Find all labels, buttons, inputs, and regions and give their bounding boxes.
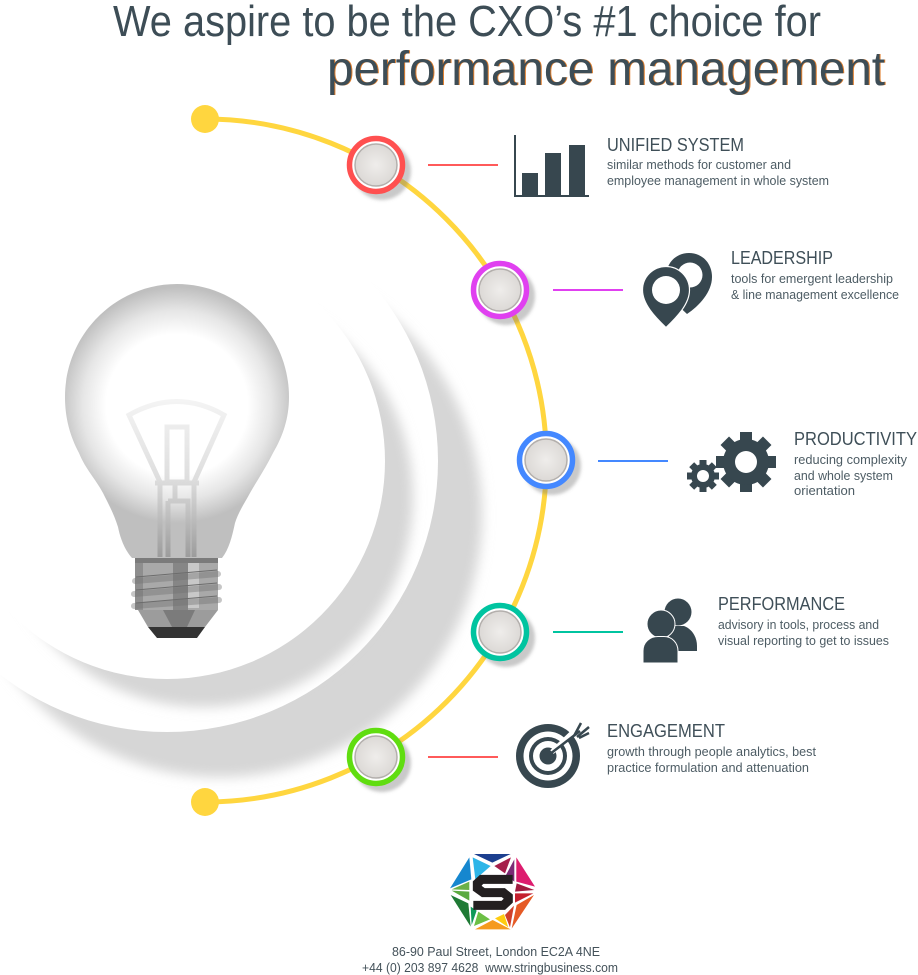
footer address: 86-90 Paul Street, London EC2A 4NE	[392, 945, 600, 959]
bottom end dot	[191, 788, 219, 816]
text: engagement: practice formulation and attenuation	[607, 761, 809, 775]
text: productivity: reducing complexity	[794, 453, 908, 467]
connector: engagement	[428, 756, 498, 758]
text: engagement	[607, 720, 817, 775]
bulb glass	[65, 284, 289, 558]
node: productivity	[520, 434, 581, 495]
text: leadership: LEADERSHIP	[731, 247, 833, 268]
text: leadership: tools for emergent leadership	[731, 272, 893, 286]
icon: bar chart	[514, 135, 589, 197]
logo	[450, 854, 535, 929]
light bulb	[65, 284, 289, 638]
icon: target	[516, 723, 589, 788]
footer address	[362, 945, 618, 975]
text: engagement: growth through people analytics, best	[607, 745, 817, 759]
text: engagement: ENGAGEMENT	[607, 720, 725, 741]
text: unified system	[607, 134, 829, 188]
text: unified system: similar methods for customer and	[607, 158, 791, 172]
footer address: +44 (0) 203 897 4628 www.stringbusiness.com	[362, 961, 618, 975]
title: performance management	[327, 43, 885, 96]
icon: people	[643, 598, 697, 663]
text: performance: advisory in tools, process and	[718, 618, 879, 632]
filament	[129, 402, 224, 557]
title	[113, 0, 886, 96]
text: unified system: UNIFIED SYSTEM	[607, 134, 744, 155]
text: productivity: orientation	[794, 484, 855, 498]
large gear	[716, 432, 776, 492]
yellow arc timeline	[191, 105, 546, 816]
connector: performance	[553, 631, 623, 633]
connector: productivity	[598, 460, 668, 462]
concentric swoosh shadows	[0, 190, 482, 777]
screw base	[134, 558, 219, 638]
icon: gears	[687, 432, 776, 492]
text: performance	[718, 593, 889, 648]
node: performance	[474, 606, 535, 667]
icon: map pins	[642, 253, 712, 328]
small gear	[687, 460, 719, 492]
node: unified system	[350, 138, 411, 200]
text: leadership	[731, 247, 899, 302]
text: performance: PERFORMANCE	[718, 593, 845, 614]
text: productivity: and whole system	[794, 469, 893, 483]
node: leadership	[474, 264, 535, 325]
connector: unified system	[428, 164, 498, 166]
text: unified system: employee management in whole system	[607, 174, 829, 188]
text: productivity	[794, 428, 917, 498]
text: leadership: & line management excellence	[731, 288, 899, 302]
node: engagement	[350, 730, 411, 792]
top end dot	[191, 105, 219, 133]
text: performance: visual reporting to get to issues	[718, 634, 889, 648]
title: performance management	[328, 43, 886, 96]
connector: leadership	[553, 289, 623, 291]
